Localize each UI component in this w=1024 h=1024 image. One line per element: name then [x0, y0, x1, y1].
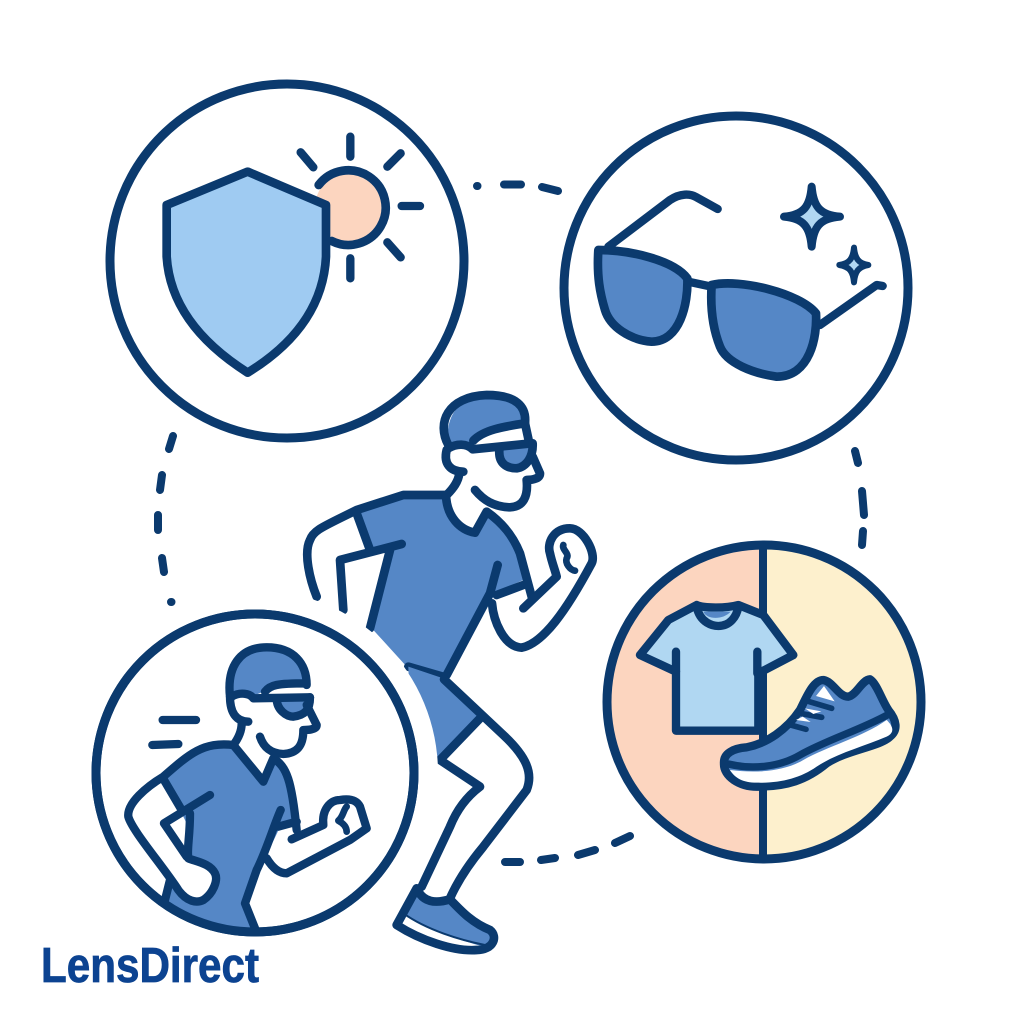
panel: apparel and footwear circle — [600, 540, 933, 870]
dashed connector: right — [855, 451, 864, 545]
portrait runner figure — [128, 647, 367, 930]
runner torso and head — [307, 395, 593, 677]
dashed connector: left — [158, 436, 173, 602]
dashed connector: bottom — [505, 836, 630, 862]
central runner — [307, 395, 593, 950]
icon: t-shirt — [640, 605, 793, 731]
icon: sunglasses — [598, 195, 883, 377]
icon: small sparkle — [839, 248, 868, 282]
icon: large sparkle — [784, 187, 840, 247]
icon: running shoe — [724, 679, 895, 787]
panel: sun protection circle — [110, 84, 464, 438]
dashed connector: top — [477, 184, 558, 191]
icon: shield — [167, 172, 326, 373]
icon: sun — [301, 137, 420, 278]
runner legs and shoe — [397, 667, 529, 950]
panel: runner portrait circle — [96, 590, 438, 932]
logo: LensDirect: LensDirect — [41, 939, 259, 993]
panel: sunglasses circle — [564, 116, 908, 460]
